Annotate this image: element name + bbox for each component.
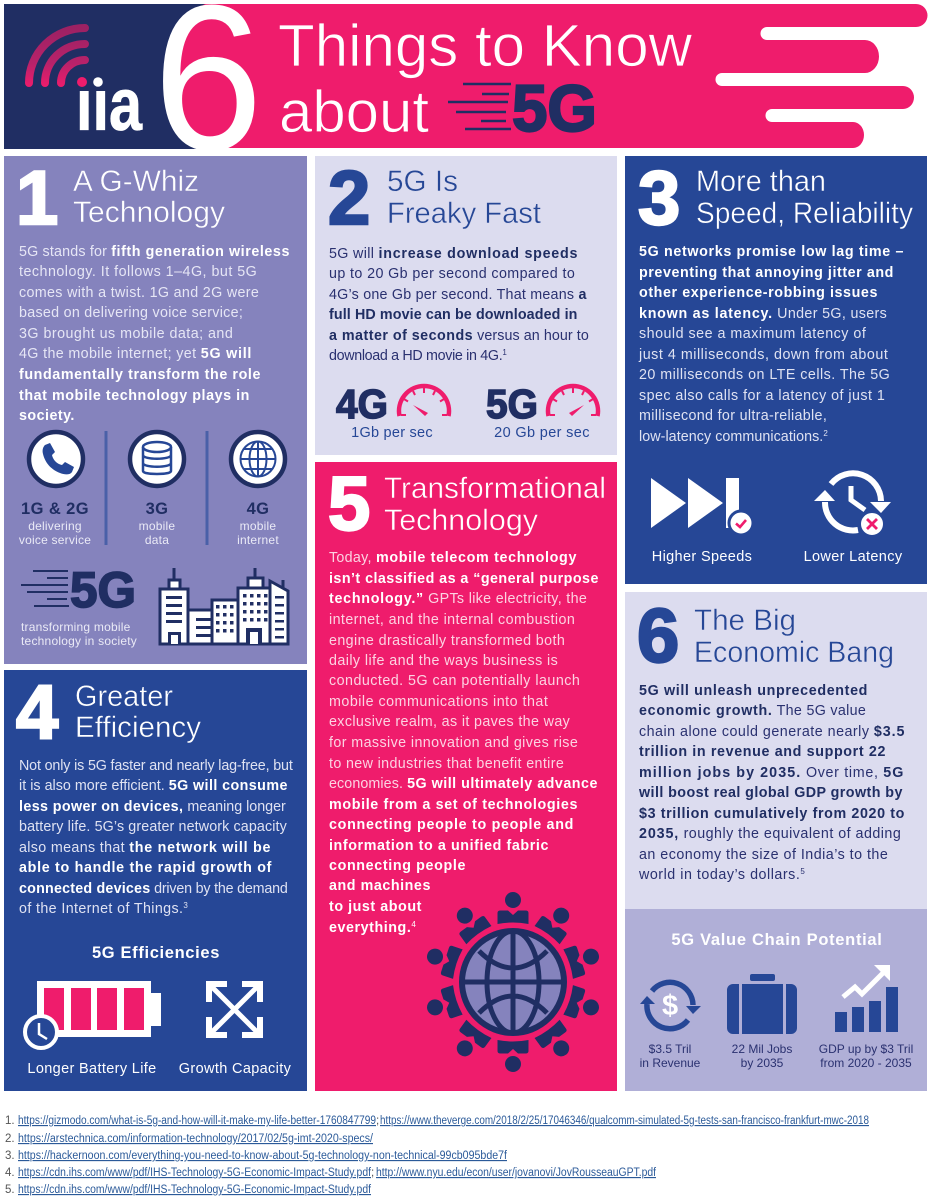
panel 5: Transformational Technology bbox=[315, 462, 617, 1091]
icon: lower latency bbox=[804, 473, 903, 565]
speed comparison 4G: 4G bbox=[336, 381, 388, 427]
body text: comes with a twist. 1G and 2G were bbox=[19, 285, 259, 301]
footnotes: https://gizmodo.com/what-is-5g-and-how-will-it-make-my-life-better-1760847799 bbox=[18, 1115, 376, 1127]
generation labels: voice service bbox=[19, 533, 91, 547]
icon: higher speeds: Higher Speeds bbox=[652, 549, 752, 565]
speed comparison 4G bbox=[336, 381, 449, 441]
number 4: 4 bbox=[16, 670, 58, 755]
body text: spec also calls for a latency of just 1 bbox=[639, 388, 885, 404]
body text: society. bbox=[19, 408, 75, 424]
body text: up to 20 Gb per second compared to bbox=[329, 266, 575, 282]
heading: Efficiency bbox=[75, 711, 201, 744]
body text: to just about bbox=[329, 899, 422, 915]
icon: jobs suitcase: 22 Mil Jobs bbox=[732, 1042, 792, 1056]
heading bbox=[75, 680, 201, 744]
heading bbox=[73, 165, 225, 229]
body text: it is also more efficient. 5G will consume bbox=[19, 778, 288, 794]
heading: Technology bbox=[73, 196, 225, 229]
body text: Today, mobile telecom technology bbox=[329, 550, 577, 566]
body text: also means that the network will be bbox=[19, 840, 271, 856]
body text: economic growth. The 5G value bbox=[639, 703, 866, 719]
body text: an economy the size of India’s to the bbox=[639, 847, 888, 863]
title bbox=[278, 12, 693, 145]
icon: globe bbox=[231, 432, 285, 486]
body text: engine drastically transformed both bbox=[329, 633, 565, 649]
footnotes: https://hackernoon.com/everything-you-need-to-know-about-5g-technology-non-technical-99cb095bde7f bbox=[18, 1150, 508, 1162]
subheading: 5G Efficiencies: 5G Efficiencies bbox=[92, 944, 220, 962]
panel: 5G value chain potential bbox=[625, 909, 927, 1091]
body text bbox=[19, 244, 290, 424]
body text: 4G’s one Gb per second. That means a bbox=[329, 287, 587, 303]
footnotes: 2. bbox=[5, 1133, 15, 1145]
icon: GDP growth chart: from 2020 - 2035 bbox=[820, 1056, 912, 1070]
icon: database bbox=[130, 432, 184, 486]
body text: less power on devices, meaning longer bbox=[19, 799, 286, 815]
body text: information to a unified fabric bbox=[329, 838, 549, 854]
body text: daily life and the ways business is bbox=[329, 653, 558, 669]
body text: other experience-robbing issues bbox=[639, 285, 878, 301]
icon: battery with clock: Longer Battery Life bbox=[27, 1061, 157, 1077]
icon: globe with people bbox=[423, 892, 603, 1072]
title: about bbox=[279, 78, 429, 145]
body text: that mobile technology plays in bbox=[19, 388, 250, 404]
body text: for massive innovation and gives rise bbox=[329, 735, 578, 751]
body text: world in today’s dollars. bbox=[639, 867, 800, 883]
generation labels: internet bbox=[237, 533, 279, 547]
speed comparison 4G: 1Gb per sec bbox=[351, 425, 433, 441]
logo: iia wifi: iia bbox=[76, 63, 143, 146]
body text: internet, and the internal combustion bbox=[329, 612, 575, 628]
footnotes: 4. bbox=[5, 1167, 15, 1179]
panel 4: Greater Efficiency bbox=[4, 670, 307, 1091]
footnotes bbox=[5, 1115, 869, 1196]
number 1: 1 bbox=[16, 156, 58, 241]
number 5: 5 bbox=[328, 462, 370, 547]
body text: known as latency. Under 5G, users bbox=[639, 306, 887, 322]
body text: 4 bbox=[411, 920, 416, 929]
footnotes: ; bbox=[376, 1115, 379, 1127]
heading: More than bbox=[696, 165, 826, 198]
body text: low-latency communications. bbox=[639, 429, 823, 445]
body text: connecting people bbox=[329, 858, 466, 874]
body text bbox=[638, 683, 905, 883]
speed comparison 5G bbox=[486, 381, 598, 441]
5G mark with caption: technology in society bbox=[21, 634, 137, 648]
body text: able to handle the rapid growth of bbox=[19, 860, 272, 876]
body text bbox=[329, 550, 599, 936]
heading: Greater bbox=[75, 680, 173, 713]
body text: mobile communications into that bbox=[329, 694, 548, 710]
body text: exclusive realm, as it paves the way bbox=[329, 714, 571, 730]
icon: battery with clock bbox=[25, 981, 161, 1077]
body text: everything. bbox=[329, 920, 411, 936]
generation labels bbox=[19, 500, 279, 547]
heading: Freaky Fast bbox=[387, 197, 541, 230]
body text: a matter of seconds versus an hour to bbox=[329, 328, 589, 344]
heading: 5G Is bbox=[387, 165, 458, 198]
body text: 5G networks promise low lag time – bbox=[639, 244, 904, 260]
body text: full HD movie can be downloaded in bbox=[329, 307, 578, 323]
footnotes: 5. bbox=[5, 1184, 15, 1196]
icon: jobs suitcase: by 2035 bbox=[741, 1056, 784, 1070]
footnotes: https://cdn.ihs.com/www/pdf/IHS-Technology-5G-Economic-Impact-Study.pdf bbox=[18, 1184, 372, 1196]
panel 2: 5G Is Freaky Fast bbox=[315, 156, 617, 455]
5G mark with caption bbox=[21, 562, 137, 648]
icon: higher speeds bbox=[651, 478, 753, 565]
body text: technology.” GPTs like electricity, the bbox=[329, 591, 587, 607]
icon: city skyline bbox=[160, 568, 288, 644]
footnotes: http://www.nyu.edu/econ/user/jovanovi/JovRousseauGPT.pdf bbox=[376, 1167, 657, 1179]
body text: of the Internet of Things. bbox=[19, 901, 183, 917]
footnotes: https://arstechnica.com/information-technology/2017/02/5g-imt-2020-specs/ bbox=[18, 1133, 374, 1145]
generation labels: data bbox=[145, 533, 169, 547]
body text: to new industries that benefit entire bbox=[329, 756, 564, 772]
body text: 20 milliseconds on LTE cells. The 5G bbox=[639, 367, 890, 383]
heading: Transformational bbox=[384, 472, 606, 505]
body text: 4G the mobile internet; yet 5G will bbox=[19, 346, 252, 362]
heading: Speed, Reliability bbox=[696, 197, 913, 230]
generation labels: 3G bbox=[146, 500, 168, 518]
5G mark with caption: transforming mobile bbox=[21, 620, 131, 634]
body text: just 4 milliseconds, down from about bbox=[638, 347, 888, 363]
body text: based on delivering voice service; bbox=[19, 305, 243, 321]
body text: 5G will increase download speeds bbox=[329, 246, 578, 262]
footnotes: https://cdn.ihs.com/www/pdf/IHS-Technology-5G-Economic-Impact-Study.pdf bbox=[18, 1167, 372, 1179]
icon: gauge slow bbox=[399, 386, 449, 416]
heading bbox=[696, 165, 913, 230]
heading: Technology bbox=[384, 504, 538, 537]
body text: 1 bbox=[502, 348, 507, 357]
body text: millisecond for ultra-reliable, bbox=[639, 408, 827, 424]
body text: economies. 5G will ultimately advance bbox=[329, 776, 598, 792]
speed comparison 5G: 20 Gb per sec bbox=[494, 425, 590, 441]
body text: mobile from a set of technologies bbox=[329, 797, 578, 813]
5G mark with caption: 5G bbox=[70, 562, 136, 618]
body text: will boost real global GDP growth by bbox=[638, 785, 903, 801]
panel 1: A G-Whiz Technology bbox=[4, 156, 307, 664]
body text bbox=[19, 758, 293, 917]
subheading: 5G Value Chain Potential bbox=[671, 931, 883, 949]
body text: 2035, roughly the equivalent of adding bbox=[639, 826, 901, 842]
icon: jobs suitcase bbox=[727, 974, 797, 1070]
body text: chain alone could generate nearly $3.5 bbox=[639, 724, 905, 740]
body text: battery life. 5G’s greater network capacity bbox=[19, 819, 288, 835]
body text: download a HD movie in 4G. bbox=[329, 348, 503, 364]
icon: revenue: in Revenue bbox=[640, 1056, 701, 1070]
icon: GDP growth chart: GDP up by $3 Tril bbox=[819, 1042, 913, 1056]
panel 6: The Big Economic Bang bbox=[625, 592, 927, 909]
panel 3: More than Speed, Reliability bbox=[625, 156, 927, 584]
icon: growth capacity arrows bbox=[179, 984, 292, 1077]
body text: and machines bbox=[329, 878, 431, 894]
title: Things to Know bbox=[278, 12, 693, 79]
body text: Not only is 5G faster and nearly lag-free, but bbox=[19, 758, 293, 774]
body text: technology. It follows 1–4G, but 5G bbox=[19, 264, 257, 280]
heading: The Big bbox=[694, 604, 796, 637]
body text: 5G will unleash unprecedented bbox=[639, 683, 868, 699]
icon: gauge fast bbox=[548, 386, 598, 416]
body text: 5 bbox=[800, 867, 805, 876]
body text bbox=[638, 244, 904, 445]
body text: 5G stands for fifth generation wireless bbox=[19, 244, 290, 260]
footnotes: 1. bbox=[5, 1115, 15, 1127]
footnotes: ; bbox=[371, 1167, 374, 1179]
icon: lower latency: Lower Latency bbox=[804, 549, 903, 565]
heading bbox=[387, 165, 541, 230]
header banner bbox=[4, 0, 928, 193]
number 6: 6 bbox=[637, 594, 679, 679]
generation labels: 1G & 2G bbox=[21, 500, 89, 518]
body text: preventing that annoying jitter and bbox=[639, 265, 894, 281]
number 3: 3 bbox=[638, 156, 680, 241]
icon: revenue: $3.5 Tril bbox=[649, 1042, 691, 1056]
number 2: 2 bbox=[328, 156, 370, 241]
body text: trillion in revenue and support 22 bbox=[639, 744, 886, 760]
icon: GDP growth chart bbox=[819, 965, 913, 1070]
generation labels: mobile bbox=[240, 519, 276, 533]
body text: connecting people to people and bbox=[329, 817, 574, 833]
body text: should see a maximum latency of bbox=[639, 326, 866, 342]
body text bbox=[329, 246, 589, 364]
body text: isn’t classified as a “general purpose bbox=[329, 571, 599, 587]
body text: fundamentally transform the role bbox=[19, 367, 261, 383]
generation labels: 4G bbox=[247, 500, 269, 518]
heading bbox=[694, 604, 894, 669]
body text: conducted. 5G can potentially launch bbox=[329, 673, 580, 689]
heading bbox=[384, 472, 606, 537]
heading: Economic Bang bbox=[694, 636, 894, 669]
logo: iia wifi bbox=[29, 28, 143, 146]
title 5G mark bbox=[448, 71, 597, 145]
speed comparison 5G: 5G bbox=[486, 381, 538, 427]
body text: connected devices driven by the demand bbox=[19, 881, 288, 897]
body text: $3 trillion cumulatively from 2020 to bbox=[639, 806, 905, 822]
generation labels: mobile bbox=[139, 519, 175, 533]
body text: million jobs by 2035. Over time, 5G bbox=[639, 765, 904, 781]
icon: phone bbox=[29, 432, 83, 486]
body text: 3 bbox=[183, 901, 188, 910]
icon: growth capacity arrows: Growth Capacity bbox=[179, 1061, 292, 1077]
icon: revenue: $ bbox=[662, 990, 678, 1022]
footnotes: 3. bbox=[5, 1150, 15, 1162]
heading: A G-Whiz bbox=[73, 165, 199, 198]
generation labels: delivering bbox=[28, 519, 82, 533]
body text: 2 bbox=[823, 429, 828, 438]
body text: 3G brought us mobile data; and bbox=[19, 326, 233, 342]
title 5G mark: 5G bbox=[512, 71, 597, 145]
icon: revenue bbox=[640, 982, 701, 1070]
